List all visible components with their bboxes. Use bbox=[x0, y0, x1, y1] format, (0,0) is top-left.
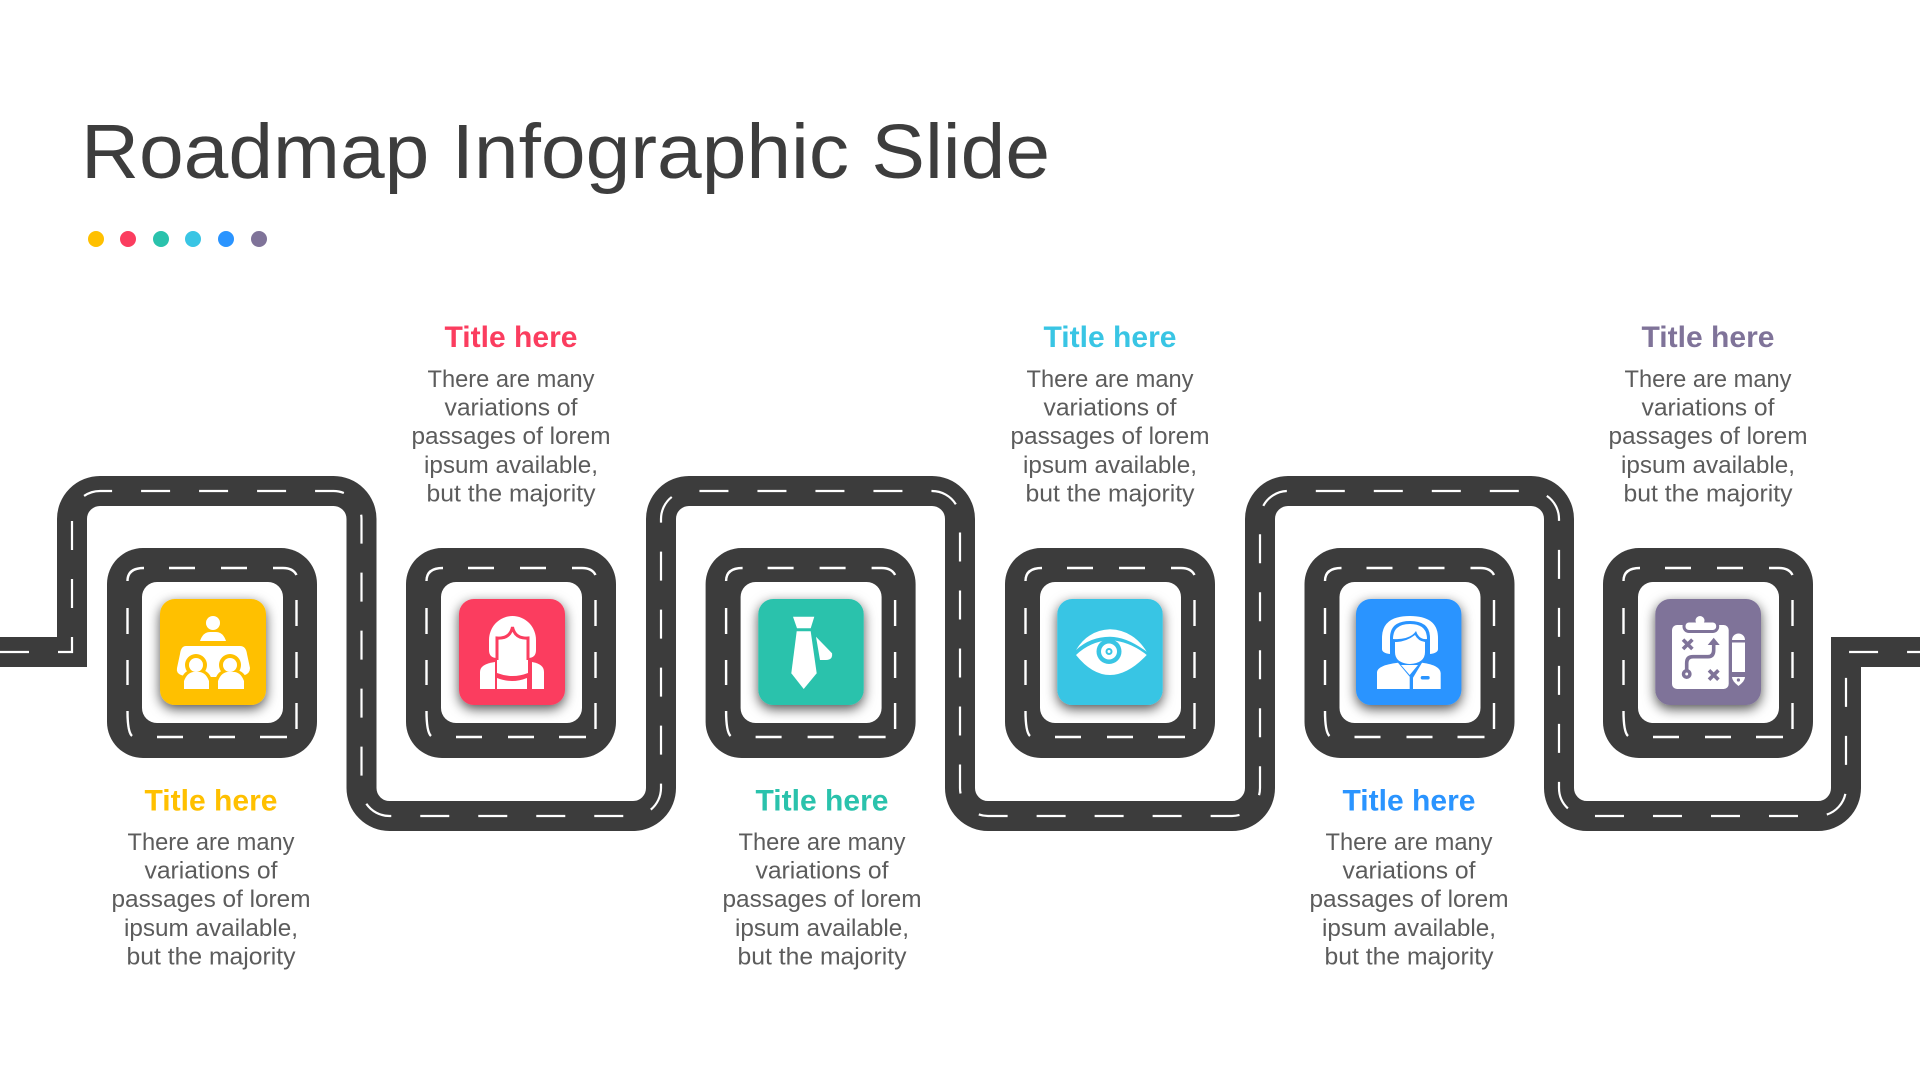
winding road bbox=[0, 491, 1920, 816]
road loop 6 bbox=[1603, 548, 1813, 758]
step 1 text: There are many bbox=[128, 829, 294, 856]
step 3 text: variations of bbox=[756, 858, 889, 884]
step 6 text: but the majority bbox=[1624, 480, 1792, 508]
road loop 2 bbox=[406, 548, 616, 758]
step 3 text: There are many bbox=[738, 829, 906, 856]
icon: woman bbox=[459, 599, 565, 705]
step 4 text: but the majority bbox=[1026, 480, 1194, 508]
step 2 text: ipsum available, bbox=[424, 452, 598, 479]
step 1 text: Title here bbox=[144, 784, 278, 818]
step 1 text: ipsum available, bbox=[124, 915, 298, 942]
step 2 text: variations of bbox=[444, 394, 578, 422]
icon: operator with headset bbox=[1356, 599, 1461, 705]
step 6 text: variations of bbox=[1642, 394, 1775, 422]
step 4 text: ipsum available, bbox=[1023, 452, 1197, 479]
step 3 text: ipsum available, bbox=[735, 915, 909, 942]
step 2 text bbox=[412, 321, 610, 508]
step 4 text: There are many bbox=[1026, 366, 1194, 393]
step 4 text: passages of lorem bbox=[1010, 423, 1210, 450]
road loop 4 bbox=[1005, 548, 1215, 758]
step 6 text: There are many bbox=[1624, 366, 1792, 393]
step 1 text bbox=[112, 784, 310, 970]
step 3 text: but the majority bbox=[738, 944, 906, 970]
step 5 text: ipsum available, bbox=[1322, 915, 1496, 942]
step 3 text: Title here bbox=[756, 784, 888, 818]
step 2 text: There are many bbox=[428, 366, 594, 393]
step 5 text: but the majority bbox=[1324, 944, 1494, 970]
step 6 text: passages of lorem bbox=[1608, 423, 1808, 450]
step 6 text: Title here bbox=[1642, 321, 1774, 354]
step 4 text: Title here bbox=[1044, 321, 1176, 354]
step 5 text: passages of lorem bbox=[1310, 886, 1508, 913]
step 2 text: Title here bbox=[444, 321, 578, 354]
step 5 text bbox=[1310, 784, 1508, 970]
icon: strategy clipboard bbox=[1655, 599, 1761, 705]
step 5 text: Title here bbox=[1342, 784, 1476, 818]
step 1 text: but the majority bbox=[126, 944, 296, 970]
icon: necktie bbox=[758, 599, 864, 705]
step 1 text: passages of lorem bbox=[112, 886, 310, 913]
colour dots bbox=[88, 231, 267, 247]
road loop 5 bbox=[1304, 548, 1514, 758]
icon: eye bbox=[1057, 599, 1163, 705]
step 4 text bbox=[1010, 321, 1210, 508]
step 2 text: passages of lorem bbox=[412, 423, 610, 450]
step 5 text: variations of bbox=[1342, 858, 1476, 884]
step 3 text: passages of lorem bbox=[722, 886, 922, 913]
step 6 text: ipsum available, bbox=[1621, 452, 1795, 479]
road loop 3 bbox=[706, 548, 916, 758]
step 6 text bbox=[1608, 321, 1808, 508]
icon: meeting table bbox=[160, 599, 266, 705]
title: Roadmap Infographic Slide bbox=[81, 109, 1050, 195]
step 5 text: There are many bbox=[1326, 829, 1492, 856]
road loop 1 bbox=[107, 548, 317, 758]
step 3 text bbox=[722, 784, 922, 970]
step 2 text: but the majority bbox=[426, 480, 596, 508]
step 4 text: variations of bbox=[1044, 394, 1177, 422]
step 1 text: variations of bbox=[144, 858, 278, 884]
